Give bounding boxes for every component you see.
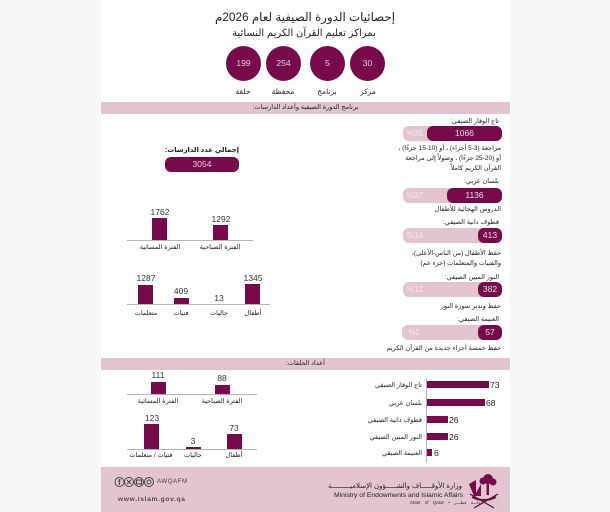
state of Qatar: State of Qatar • دولـــة قطـــر <box>410 500 483 505</box>
ministry name English: Ministry of Endowments and Islamic Affairs <box>334 492 463 499</box>
chart: students by period: الفترة الصباحية <box>200 244 240 250</box>
chart: halaqat by programme: تاج الوقار الصيفي <box>375 382 422 388</box>
programme 5 bar <box>402 325 502 340</box>
programme 1 description: أو (20-25 جزءًا) ، وصولاً إلى مراجعة <box>405 154 501 162</box>
chart: halaqat by programme: قطوف دانية الصيفي <box>368 416 422 424</box>
chart: halaqat by period: 111 <box>152 370 164 380</box>
programme 1 bar <box>403 126 502 141</box>
stat: centres count <box>350 46 385 81</box>
programme 2 bar <box>403 188 502 203</box>
chart: students by category: فتيات <box>173 310 189 316</box>
chart: halaqat by period: الفترة الصباحية <box>202 398 242 404</box>
chart: students by period: الفترة المسائية <box>140 244 180 250</box>
chart: students by category <box>127 273 270 316</box>
programme 5 description: حفظ خمسة أجزاء جديدة من القرآن الكريم <box>387 344 501 352</box>
ministry name Arabic: وزارة الأوقـــــاف والشـــــؤون الإسلاميـــــــــة <box>328 483 462 490</box>
programme 4 bar: %12 <box>407 285 423 294</box>
chart: halaqat by programme: 26 <box>449 432 458 442</box>
chart: halaqat by programme: الغنيمة الصيفي <box>382 450 422 456</box>
programme 3 description: حفظ الأطفال (من الناس-الأعلى)، <box>412 250 501 256</box>
programme 1 bar: 1066 <box>455 128 474 138</box>
programme 5 bar: %2 <box>408 328 420 337</box>
label: governorate: محفظة <box>272 86 294 96</box>
chart: halaqat by category: جاليات <box>184 452 202 458</box>
programme 3 bar: 413 <box>483 230 497 240</box>
total students pill <box>165 157 239 172</box>
stat: programmes count: 5 <box>325 58 330 68</box>
title: إحصائيات الدورة الصيفية لعام 2026م <box>215 10 395 24</box>
stat: governorates count: 254 <box>276 58 291 68</box>
programme 2 bar: %37 <box>407 191 423 200</box>
chart: halaqat by category: 3 <box>191 436 195 446</box>
chart: students by period: 1762 <box>151 207 169 217</box>
programme 5 bar: 57 <box>485 327 495 337</box>
programme 3 description <box>412 248 501 267</box>
chart: students by category: متعلمات <box>135 310 157 316</box>
panel: programme 2 heading: بلسان عربي: <box>464 178 499 184</box>
chart: halaqat by category: أطفال <box>226 452 242 458</box>
chart: halaqat by category: 123 <box>145 413 159 423</box>
programme 4 bar: 382 <box>483 284 497 294</box>
stat: halaqa count: 199 <box>236 58 251 68</box>
social handle: AWQAFM <box>157 478 188 485</box>
chart: halaqat by period: الفترة المسائية <box>138 398 178 404</box>
chart: students by category: جاليات <box>210 310 228 316</box>
chart: students by category: 1287 <box>137 273 155 283</box>
programme 4 description: حفظ وتدبر سورة النور <box>441 302 501 310</box>
stat: governorates count <box>266 46 301 81</box>
chart: halaqat by programme: بلسان عربي <box>389 400 422 406</box>
chart: halaqat by programme <box>368 378 500 463</box>
programme 2 description: الدروس الهجائية للأطفال <box>435 206 501 212</box>
programme 1 description: القرآن الكريم كاملاً <box>451 164 501 172</box>
stat: centres count: 30 <box>363 58 372 68</box>
panel: programme 3 heading: قطوف دانية الصيفي: <box>443 218 499 226</box>
programme 2 bar: 1136 <box>465 190 484 200</box>
chart: students by category: 409 <box>174 286 188 296</box>
chart: halaqat by programme: النور المبين الصيفي <box>370 434 422 440</box>
programme 4 bar <box>403 282 502 297</box>
chart: students by category: 13 <box>214 293 224 303</box>
programme 1 description: مراجعة (3-5 أجزاء) ، أو (10-15 جزءًا) ، <box>398 144 501 152</box>
chart: students by category: 1345 <box>244 273 262 283</box>
icon: ministry emblem <box>469 474 498 508</box>
chart: students by category: أطفال <box>245 310 261 316</box>
programme 3 description: والفتيات والمتعلمات (جزء عم) <box>420 260 501 266</box>
stat: halaqa count <box>226 46 261 81</box>
chart: halaqat by category: فتيات / متعلمات <box>129 452 173 458</box>
chart: halaqat by programme: 73 <box>490 380 499 390</box>
social icons: f <box>118 478 121 487</box>
panel: programme 1 heading: تاج الوقار الصيفي: <box>450 118 499 124</box>
section band: programmes: برنامج الدورة الصيفية وأعداد الدارسات: <box>253 104 358 111</box>
label: centre: مركز <box>360 86 376 96</box>
chart: students by period <box>127 207 253 251</box>
programme 1 description <box>398 144 501 172</box>
section band: halaqat <box>101 358 510 370</box>
section band: halaqat: أعداد الحلقات: <box>286 360 325 367</box>
chart: halaqat by period <box>127 370 257 405</box>
stat: programmes count <box>310 46 345 81</box>
panel: programme 5 heading: الغنيمة الصيفي: <box>457 316 499 322</box>
label: programme: برنامج <box>317 86 337 96</box>
chart: halaqat by category: 73 <box>229 423 239 433</box>
total students pill: 3054 <box>193 159 211 169</box>
subtitle: بمراكز تعليم القرآن الكريم النسائية <box>232 28 376 38</box>
chart: halaqat by category <box>127 413 257 458</box>
chart: halaqat by programme: 26 <box>449 415 458 425</box>
social icons <box>114 477 154 487</box>
page background panel <box>101 0 510 512</box>
footer <box>101 467 510 512</box>
heading: total students: إجمالي عدد الدارسات: <box>165 146 239 154</box>
label: halaqa: حلقة <box>236 86 250 96</box>
chart: halaqat by programme: 6 <box>434 448 439 458</box>
programme 3 bar <box>403 228 502 243</box>
website: www.islam.gov.qa <box>118 496 186 503</box>
panel: programme 4 heading: النور المبين الصيفي: <box>445 274 499 280</box>
chart: students by period: 1292 <box>212 214 230 224</box>
programme 3 bar: %14 <box>407 231 423 240</box>
chart: halaqat by period: 88 <box>217 373 227 383</box>
section band: programmes <box>101 102 510 114</box>
chart: halaqat by programme: 68 <box>486 398 495 408</box>
programme 1 bar: %35 <box>407 129 423 138</box>
